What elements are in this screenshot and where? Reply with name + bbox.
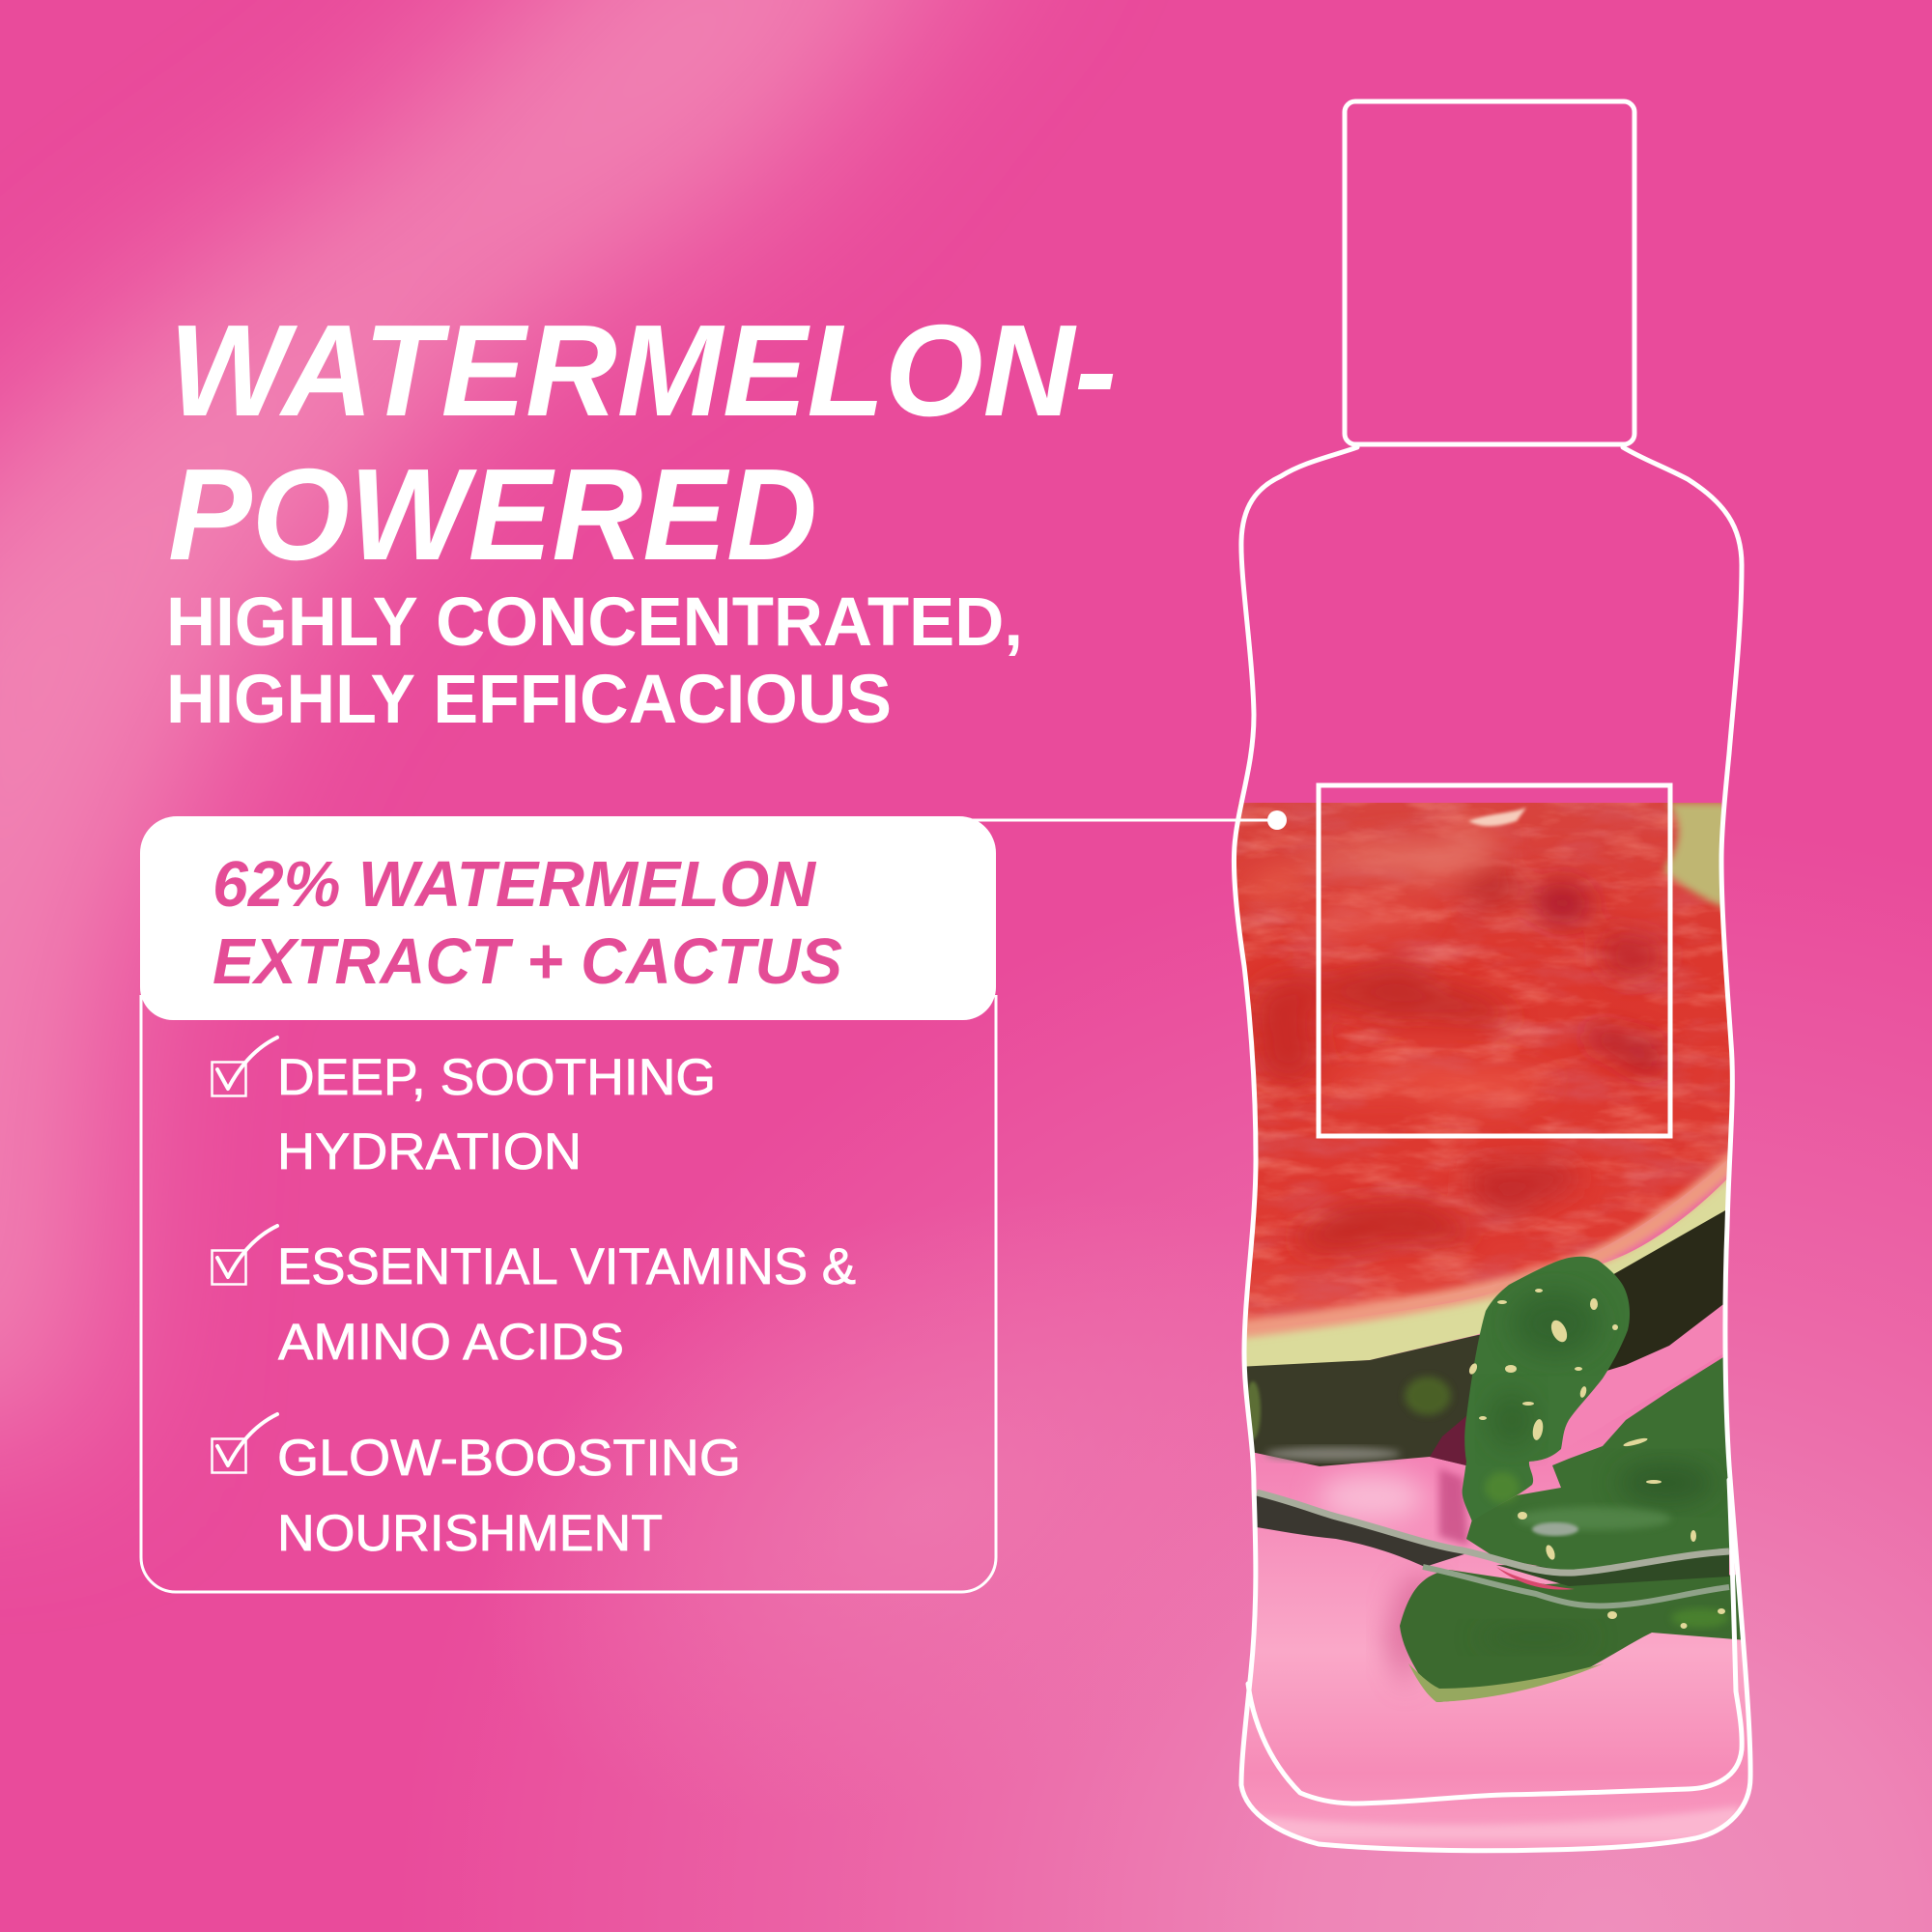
- inner liquid line: [1248, 1480, 1742, 1804]
- dark slit band: [1496, 1546, 1729, 1586]
- icon: checkbox: [213, 1226, 277, 1285]
- water ripples: [1251, 1492, 1729, 1605]
- cactus shading: [1478, 1291, 1729, 1649]
- flesh highlight: [1468, 808, 1526, 826]
- bottle body: [1234, 447, 1750, 1851]
- watermelon flesh: [1227, 803, 1739, 1336]
- panel header: [140, 816, 996, 1020]
- label window rectangle: [1319, 785, 1670, 1136]
- bottle photo: watermelon and cactus: [1227, 803, 1768, 1864]
- watermelon rind left: [1246, 1335, 1480, 1466]
- surface glare: [1256, 1294, 1739, 1840]
- watermelon rim: [1246, 1179, 1727, 1366]
- benefit: glow: NOURISHMENT: [277, 1505, 663, 1562]
- cactus spines: [1467, 1289, 1725, 1629]
- flesh marbling: [1241, 827, 1664, 1254]
- subtitle: HIGHLY EFFICACIOUS: [166, 662, 892, 738]
- panel header: 62% WATERMELON: [213, 848, 817, 921]
- subtitle: [166, 584, 1023, 738]
- cactus pads: [1400, 1257, 1747, 1702]
- title: POWERED: [168, 441, 817, 587]
- benefit: hydration: [213, 1037, 716, 1180]
- right cactus pad: [1466, 1348, 1739, 1572]
- benefit: vitamins: AMINO ACIDS: [278, 1314, 624, 1371]
- benefit: hydration: DEEP, SOOTHING: [277, 1049, 716, 1106]
- panel header: EXTRACT + CACTUS: [213, 925, 842, 998]
- icon: checkbox: [213, 1414, 277, 1472]
- lower cactus pad: [1400, 1570, 1747, 1702]
- benefit: hydration: HYDRATION: [277, 1123, 582, 1180]
- lower pad edge: [1408, 1663, 1604, 1702]
- pink surface: [1244, 1334, 1748, 1849]
- benefit: vitamins: [213, 1226, 856, 1371]
- rim blush: [1241, 1156, 1739, 1329]
- benefit: glow: GLOW-BOOSTING: [277, 1430, 741, 1487]
- icon: checkbox: [213, 1037, 277, 1095]
- panel outline: [141, 995, 996, 1592]
- top-right pale rind: [1660, 803, 1721, 912]
- title: WATERMELON-: [169, 298, 1117, 443]
- bottle outline: [1234, 101, 1750, 1851]
- benefit: vitamins: ESSENTIAL VITAMINS &: [277, 1238, 856, 1295]
- upper cactus pad: [1463, 1257, 1630, 1521]
- benefit: glow: [213, 1414, 741, 1562]
- panel: benefits: [140, 816, 996, 1592]
- subtitle: HIGHLY CONCENTRATED,: [166, 584, 1023, 661]
- watermelon rind right: [1607, 1210, 1725, 1371]
- connector line and dot: [966, 810, 1287, 830]
- title: [168, 298, 1117, 587]
- bottle cap: [1345, 101, 1634, 444]
